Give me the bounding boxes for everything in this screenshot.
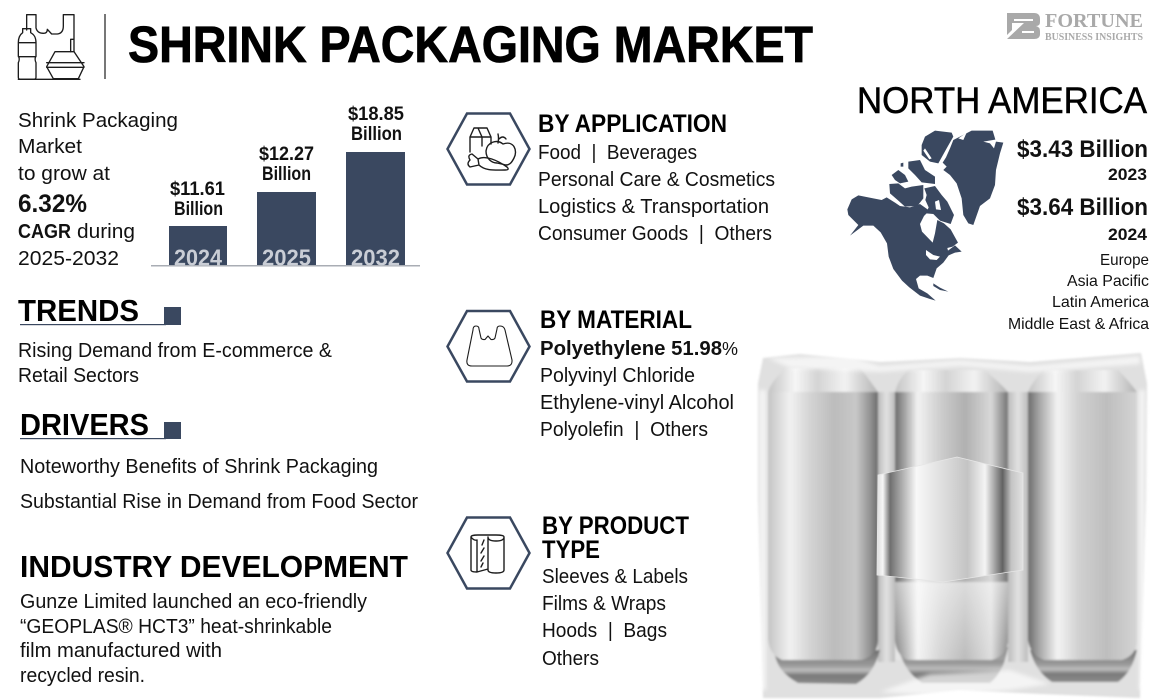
- bar chart: 2025: [262, 244, 311, 270]
- list: applications: Food | Beverages: [538, 142, 697, 164]
- heading: industry development: INDUSTRY DEVELOPMENT: [20, 549, 408, 584]
- panel: industry development: [20, 549, 408, 687]
- list: product types: [542, 566, 688, 670]
- list: other regions: Asia Pacific: [1067, 273, 1149, 290]
- text: industry development body: [20, 591, 367, 687]
- panel: regional insight: [847, 80, 1149, 333]
- text: CAGR statement: CAGR: [18, 221, 71, 243]
- text: industry development body: film manufactured with: [20, 640, 222, 662]
- text: drivers body: Noteworthy Benefits of Shrink Packaging: [20, 456, 378, 478]
- text: drivers body: [20, 456, 418, 513]
- map: north america: [847, 131, 1003, 301]
- heading: trends: TRENDS: [18, 293, 139, 328]
- list: product types: Films & Wraps: [542, 593, 666, 615]
- panel: market growth summary: [18, 104, 420, 270]
- icon: food and beverage hexagon: [448, 114, 530, 184]
- heading: by product type: BY PRODUCT: [542, 512, 689, 540]
- text: CAGR statement: during: [77, 221, 135, 243]
- title: SHRINK PACKAGING MARKET: [128, 16, 813, 73]
- card window: [877, 457, 1023, 582]
- text: industry development body: recycled resin.: [20, 665, 145, 687]
- image: shrink-wrapped cans: [758, 353, 1147, 698]
- list: materials: Ethylene-vinyl Alcohol: [540, 392, 734, 414]
- list: other regions: Latin America: [1052, 294, 1149, 311]
- heading: by product type: TYPE: [542, 536, 600, 564]
- stats: market size: 2024: [1108, 225, 1148, 244]
- text: trends body: Retail Sectors: [18, 365, 139, 387]
- bar chart: 2024: [174, 244, 222, 270]
- bar chart: $18.85: [348, 104, 404, 125]
- panel: drivers: [20, 407, 418, 513]
- text: CAGR statement: [18, 110, 178, 270]
- list: applications: Personal Care & Cosmetics: [538, 169, 775, 191]
- list: product types: Hoods | Bags: [542, 620, 667, 642]
- list: applications: [538, 142, 775, 245]
- list: materials: Polyolefin | Others: [540, 419, 708, 441]
- bar chart: 2032: [351, 244, 400, 270]
- heading: north america: NORTH AMERICA: [857, 80, 1147, 121]
- stats: market size: $3.43 Billion: [1017, 136, 1148, 163]
- heading: by application: BY APPLICATION: [538, 110, 727, 138]
- text: trends body: Rising Demand from E-commerce &: [18, 340, 333, 362]
- text: CAGR statement: Shrink Packaging: [18, 110, 178, 132]
- text: CAGR statement: Market: [18, 136, 82, 158]
- list: materials: Polyvinyl Chloride: [540, 365, 695, 387]
- logo: Fortune Business Insights: BUSINESS INSIGHTS: [1045, 32, 1143, 43]
- list: other regions: [1008, 252, 1149, 333]
- stats: market size: $3.64 Billion: [1017, 194, 1148, 221]
- logo: Fortune Business Insights: FORTUNE: [1045, 10, 1143, 32]
- text: CAGR statement: 6.32%: [18, 190, 87, 218]
- divider: [104, 14, 106, 79]
- bar chart: Billion: [351, 124, 402, 145]
- icon: film roll hexagon: [448, 518, 530, 588]
- bar chart: $11.61: [170, 179, 225, 200]
- heading: drivers: DRIVERS: [20, 407, 149, 442]
- heading: by material: BY MATERIAL: [540, 306, 692, 334]
- icon: plastic bag hexagon: [448, 311, 530, 382]
- bar chart: $12.27: [259, 144, 314, 165]
- list: materials: Polyethylene 51.98: [540, 338, 722, 360]
- panel: by material: [540, 306, 738, 441]
- icon: packaging products: [18, 15, 84, 79]
- text: trends body: [18, 340, 333, 387]
- panel: trends: [18, 293, 333, 387]
- list: product types: Sleeves & Labels: [542, 566, 688, 588]
- stats: market size: [1017, 136, 1148, 244]
- stats: market size: 2023: [1108, 165, 1147, 184]
- list: applications: Logistics & Transportation: [538, 196, 769, 218]
- bar chart: Billion: [262, 164, 311, 185]
- text: industry development body: “GEOPLAS® HCT3” heat-shrinkable: [20, 616, 332, 638]
- text: CAGR statement: 2025-2032: [18, 248, 119, 270]
- list: product types: Others: [542, 648, 599, 670]
- text: industry development body: Gunze Limited launched an eco-friendly: [20, 591, 367, 613]
- logo: Fortune Business Insights: [1007, 10, 1143, 43]
- list: other regions: Middle East & Africa: [1008, 316, 1149, 333]
- list: applications: Consumer Goods | Others: [538, 223, 772, 245]
- bar chart: Billion: [174, 199, 223, 220]
- heading: by product type: [542, 512, 689, 564]
- panel: by application: [538, 110, 775, 245]
- text: drivers body: Substantial Rise in Demand from Food Sector: [20, 491, 418, 513]
- list: other regions: Europe: [1100, 252, 1149, 269]
- bar chart: [151, 104, 420, 270]
- panel: by product type: [542, 512, 689, 670]
- list: materials: [540, 338, 738, 441]
- text: CAGR statement: to grow at: [18, 163, 110, 185]
- list: materials: %: [722, 339, 738, 359]
